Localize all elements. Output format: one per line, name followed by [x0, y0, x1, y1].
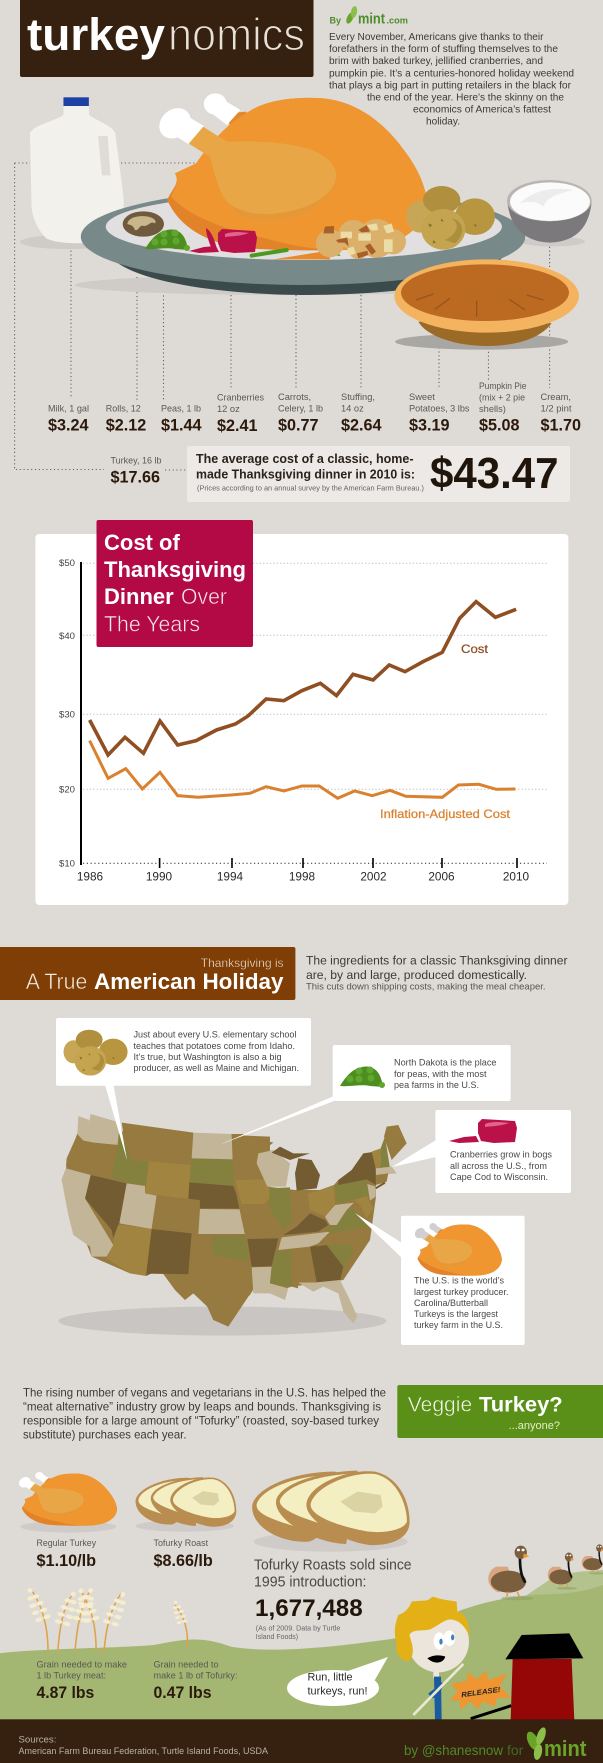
icon: wheat, turkey grain: [21, 1585, 131, 1653]
western states: [62, 1114, 270, 1327]
panel: cost line chart: [35, 520, 568, 905]
callout text: Cape Cod to Wisconsin.: [450, 1172, 548, 1183]
price: cream: Cream,: [540, 392, 571, 402]
heading: a true american holiday: A True: [26, 969, 87, 994]
callout text: turkey farm in the U.S.: [414, 1320, 503, 1331]
release starburst: RELEASE!: [461, 1685, 501, 1699]
stat: grain for turkey: Grain needed to make: [36, 1660, 127, 1670]
icon: cranberries: [189, 228, 257, 253]
heading: a true american holiday: [0, 947, 295, 1000]
speech bubble: turkeys, run!: [308, 1686, 368, 1698]
icon: cranberries: [449, 1119, 517, 1143]
stat: tofurky price: [154, 1538, 213, 1570]
icon: dinner roll: [123, 211, 164, 237]
price: carrots and celery: Carrots,: [278, 392, 311, 402]
price: carrots and celery: [278, 392, 323, 434]
price: milk: $3.24: [48, 416, 89, 434]
total cost panel: $43.47: [430, 449, 558, 498]
intro paragraph: pumpkin pie. It’s a centuries-honored holiday weekend: [329, 68, 574, 79]
chart title: [96, 520, 253, 647]
total cost panel: The average cost of a classic, home-: [196, 452, 414, 466]
stat: tofurky roasts sold: (As of 2009. Data by Turtle: [256, 1624, 340, 1632]
byline: by mint.com: By: [330, 16, 341, 26]
x axis labels: 2010: [503, 870, 530, 884]
callout: turkey: [355, 1213, 525, 1345]
price: cream: $1.70: [540, 416, 581, 434]
stat: tofurky roasts sold: Tofurky Roasts sold since: [254, 1556, 412, 1574]
price: rolls: Rolls, 12: [106, 404, 141, 414]
stat: grain for turkey: 4.87 lbs: [36, 1684, 94, 1702]
holiday intro text: [306, 954, 568, 992]
price: sweet potatoes: [409, 392, 470, 434]
stat: tofurky roasts sold: 1995 introduction:: [254, 1574, 366, 1590]
y axis labels: $10: [59, 858, 75, 868]
price: stuffing: 14 oz: [341, 404, 364, 414]
icon: regular turkey: [17, 1472, 117, 1532]
price: rolls: [106, 404, 146, 434]
line label: cost: Cost: [461, 642, 489, 656]
chart title: Over: [181, 584, 227, 609]
price list: [48, 381, 581, 486]
price: cream: [540, 392, 581, 434]
callout text: [414, 1276, 508, 1331]
intro paragraph: forefathers in the form of stuffing themselves to the: [329, 44, 558, 55]
callout text: producer, as well as Maine and Michigan.: [134, 1063, 299, 1074]
total cost panel: made Thanksgiving dinner in 2010 is:: [196, 468, 415, 482]
price: cream: 1/2 pint: [540, 404, 572, 414]
illustration: cartoon man with barn: [395, 1597, 583, 1721]
intro paragraph: the end of the year. Here’s the skinny on the: [367, 92, 564, 104]
title banner: nomics: [168, 9, 305, 60]
price: peas: [161, 404, 202, 434]
price: peas: Peas, 1 lb: [161, 404, 201, 414]
heading: veggie turkey: [397, 1385, 603, 1438]
intro paragraph: [329, 32, 574, 128]
icon: large tofurky roast: [252, 1471, 410, 1552]
lever: [471, 1706, 511, 1719]
credit: [404, 1726, 587, 1761]
callout text: for peas, with the most: [394, 1069, 487, 1080]
heading: veggie turkey: Veggie: [408, 1393, 472, 1417]
credit: by @shanesnow: [404, 1742, 504, 1758]
x axis labels: 1998: [289, 870, 316, 884]
icon: milk jug: [30, 97, 124, 243]
price: pumpkin pie: shells): [479, 404, 506, 414]
icon: peas: [340, 1066, 385, 1088]
price: cranberries: $2.41: [217, 417, 258, 435]
stat: grain for tofurky: make 1 lb of Tofurky:: [154, 1670, 238, 1680]
price: pumpkin pie: $5.08: [479, 416, 520, 434]
price: sweet potatoes: $3.19: [409, 416, 450, 434]
callout text: Turkeys is the largest: [414, 1309, 498, 1320]
callout text: [394, 1058, 496, 1091]
barn: [505, 1633, 583, 1720]
price: turkey: [110, 456, 162, 486]
heading: a true american holiday: Thanksgiving is: [201, 956, 284, 970]
shadows under food: [20, 235, 585, 295]
price: pumpkin pie: [479, 381, 526, 434]
x axis labels: [77, 870, 530, 884]
speech bubble: [287, 1657, 388, 1706]
x axis labels: 1990: [146, 870, 173, 884]
price: milk: [48, 404, 89, 434]
x axis labels: 1994: [217, 870, 244, 884]
heading: veggie turkey: ...anyone?: [509, 1420, 560, 1432]
intro paragraph: Every November, Americans give thanks to their: [329, 32, 544, 43]
stat: tofurky roasts sold: 1,677,488: [255, 1595, 363, 1622]
icon: small tofurky roast: [135, 1477, 236, 1532]
stat: grain for turkey: 1 lb Turkey meat:: [36, 1670, 106, 1680]
veggie intro text: substitute) purchases each year.: [23, 1428, 186, 1441]
footer: [0, 1719, 603, 1763]
heading: a true american holiday: American Holiday: [94, 969, 284, 994]
plate: [81, 188, 525, 295]
intro paragraph: brim with baked turkey, jellified cranberries, and: [329, 56, 543, 67]
eastern states: [232, 1125, 407, 1323]
icon: turkey: [413, 1223, 502, 1276]
total cost panel: (Prices according to an annual survey by the American Farm Bureau.): [197, 484, 424, 492]
price: stuffing: [341, 392, 382, 434]
price: peas: $1.44: [161, 416, 202, 434]
dotted leader lines: [15, 163, 550, 470]
stat: grain for tofurky: 0.47 lbs: [154, 1684, 212, 1702]
icon: whipped cream bowl: [507, 180, 592, 243]
title banner: turkey: [27, 9, 165, 60]
price: rolls: $2.12: [106, 416, 146, 434]
callout text: Cranberries grow in bogs: [450, 1150, 552, 1160]
stat: regular turkey price: [36, 1538, 96, 1570]
stat: tofurky roasts sold: [254, 1556, 412, 1641]
intro paragraph: that plays a big part in putting retailers in the black for: [329, 80, 572, 92]
map: united states: [62, 1114, 407, 1327]
chart gridlines and axis: [80, 562, 547, 868]
callout text: all across the U.S., from: [450, 1161, 547, 1172]
price: cranberries: 12 oz: [217, 404, 240, 414]
veggie intro text: “meat alternative” industry grow by leaps and bounds. Thanksgiving is: [23, 1401, 381, 1414]
release starburst: [450, 1671, 511, 1710]
icon: pumpkin pie: [394, 259, 579, 350]
line label: inflation-adjusted: Inflation-Adjusted Cost: [380, 807, 511, 821]
y axis labels: $30: [59, 710, 75, 720]
credit: for: [507, 1742, 524, 1758]
stat: regular turkey price: $1.10/lb: [36, 1552, 96, 1570]
price: sweet potatoes: Potatoes, 3 lbs: [409, 404, 470, 414]
intro paragraph: economics of America’s fattest: [413, 104, 551, 116]
icons: running turkeys: [488, 1544, 603, 1600]
callout text: The U.S. is the world’s: [414, 1276, 504, 1286]
title banner: [20, 0, 314, 77]
veggie intro text: responsible for a large amount of “Tofurky” (roasted, soy-based turkey: [23, 1414, 379, 1427]
y axis labels: $40: [59, 631, 75, 641]
price: sweet potatoes: Sweet: [409, 392, 435, 402]
price: carrots and celery: $0.77: [278, 416, 319, 434]
speech bubble: Run, little: [308, 1672, 352, 1684]
icon: wheat, tofurky grain: [170, 1599, 188, 1647]
y axis labels: $20: [59, 784, 75, 794]
chart title: Dinner: [104, 584, 174, 609]
byline: by mint.com: [330, 6, 408, 27]
map shadow: [58, 1306, 386, 1336]
chart title: Cost of: [104, 530, 180, 555]
callout text: pea farms in the U.S.: [394, 1080, 479, 1091]
callout text: North Dakota is the place: [394, 1058, 496, 1068]
stat: tofurky roasts sold: Island Foods): [256, 1632, 299, 1641]
x axis labels: 1986: [77, 870, 104, 884]
holiday intro text: This cuts down shipping costs, making the meal cheaper.: [306, 980, 546, 992]
callout text: It’s true, but Washington is also a big: [134, 1052, 282, 1063]
sources: American Farm Bureau Federation, Turtle Island Foods, USDA: [18, 1746, 269, 1757]
price: pumpkin pie: (mix + 2 pie: [479, 392, 525, 402]
icon: potatoes: [64, 1030, 128, 1076]
callout text: Just about every U.S. elementary school: [134, 1030, 296, 1040]
price: stuffing: Stuffing,: [341, 392, 375, 402]
stat: tofurky price: $8.66/lb: [154, 1552, 213, 1570]
callout: potatoes: [56, 1018, 311, 1160]
y axis labels: $50: [59, 558, 75, 568]
veggie intro text: The rising number of vegans and vegetarians in the U.S. has helped the: [23, 1387, 386, 1400]
stat: regular turkey price: Regular Turkey: [36, 1538, 96, 1548]
credit: mint: [544, 1736, 587, 1761]
price: turkey: $17.66: [110, 468, 160, 486]
callout text: teaches that potatoes come from Idaho.: [134, 1041, 295, 1052]
price: stuffing: $2.64: [341, 416, 382, 434]
byline: by mint.com: mint: [358, 10, 385, 28]
icon: peas: [145, 230, 190, 251]
line: cost: [90, 602, 516, 755]
price: cranberries: Cranberries: [217, 392, 264, 402]
price: turkey: Turkey, 16 lb: [110, 456, 162, 466]
price: cranberries: [217, 392, 264, 435]
total cost panel: [187, 446, 570, 502]
price: milk: Milk, 1 gal: [48, 404, 89, 414]
icon: sweet potatoes: [406, 186, 495, 250]
callout: peas: [219, 1045, 511, 1145]
callout text: Carolina/Butterball: [414, 1298, 488, 1309]
chart title: The Years: [104, 612, 200, 636]
icon: stuffing: [316, 219, 406, 259]
callout: cranberries: [392, 1110, 571, 1193]
stat: tofurky price: Tofurky Roast: [154, 1538, 208, 1548]
callout text: largest turkey producer.: [414, 1287, 508, 1298]
x axis labels: 2006: [428, 870, 455, 884]
heading: veggie turkey: Turkey?: [479, 1393, 563, 1417]
callout text: [450, 1150, 552, 1183]
icon: roast turkey: [153, 93, 427, 250]
chart title: Thanksgiving: [104, 557, 246, 582]
holiday intro text: The ingredients for a classic Thanksgiving dinner: [306, 954, 568, 968]
x axis labels: 2002: [360, 870, 387, 884]
cartoon man: [395, 1597, 470, 1721]
hills: [0, 1570, 603, 1721]
line: inflation-adjusted cost: [90, 741, 515, 798]
stat: grain for tofurky: [154, 1660, 238, 1702]
price: carrots and celery: Celery, 1 lb: [278, 404, 323, 414]
byline: by mint.com: .com: [386, 16, 408, 26]
stat: grain for tofurky: Grain needed to: [154, 1660, 218, 1670]
sources: Sources:: [18, 1734, 56, 1746]
y axis labels: [59, 558, 75, 868]
sources: [18, 1734, 269, 1757]
intro paragraph: holiday.: [426, 116, 460, 128]
veggie intro text: [23, 1387, 386, 1441]
icon: carrots and green beans: [252, 248, 341, 259]
callout text: [134, 1030, 299, 1074]
stat: grain for turkey: [36, 1660, 127, 1702]
holiday intro text: are, by and large, produced domestically.: [306, 968, 527, 982]
price: pumpkin pie: Pumpkin Pie: [479, 381, 526, 391]
